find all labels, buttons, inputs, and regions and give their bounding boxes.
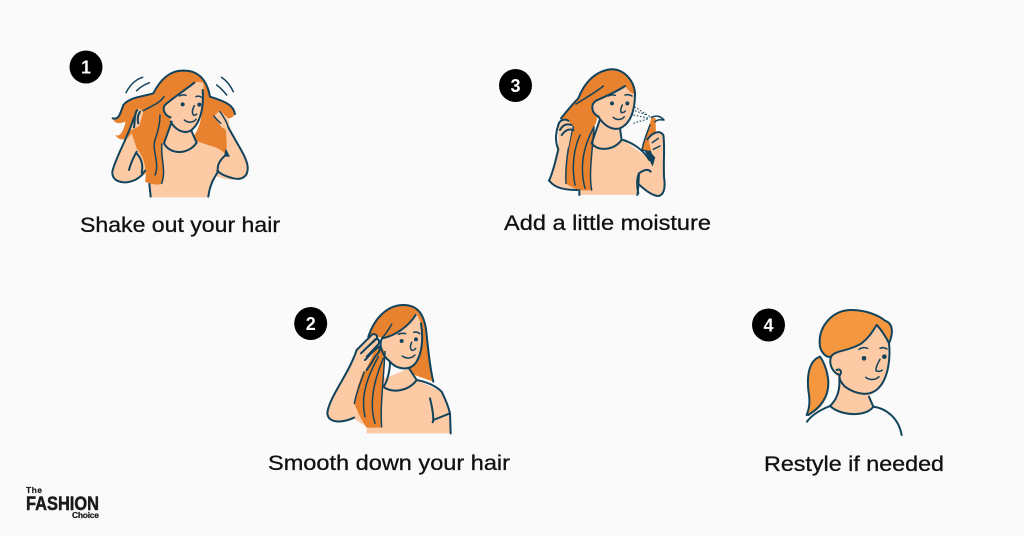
number badge 4: 4 <box>763 316 774 336</box>
icon: woman shaking out hair <box>112 71 248 197</box>
panel: step 2 smooth down your hair <box>268 305 510 475</box>
number badge 4 <box>752 308 785 342</box>
number badge 3 <box>499 69 532 102</box>
label: add a little moisture: Add a little moisture <box>504 212 711 235</box>
label: shake out your hair: Shake out your hair <box>80 214 280 237</box>
logo: The Fashion Choice <box>26 485 99 520</box>
panel: step 3 add a little moisture <box>499 69 711 235</box>
number badge 2: 2 <box>306 314 316 334</box>
number badge 1 <box>70 50 102 84</box>
icon: woman spraying hair <box>548 69 665 196</box>
number badge 1: 1 <box>81 58 91 78</box>
logo: The Fashion Choice: Choice <box>72 510 99 520</box>
number badge 2 <box>294 307 327 340</box>
label: restyle if needed: Restyle if needed <box>764 453 944 476</box>
logo: The Fashion Choice: FASHION <box>26 494 99 515</box>
logo: The Fashion Choice: The <box>26 485 42 495</box>
label: smooth down your hair: Smooth down your hair <box>268 452 510 475</box>
icon: woman with ponytail <box>807 310 902 435</box>
number badge 3: 3 <box>510 76 521 96</box>
panel: step 1 shake out your hair <box>70 50 280 237</box>
icon: woman smoothing hair <box>327 305 451 433</box>
panel: step 4 restyle if needed <box>752 308 944 476</box>
